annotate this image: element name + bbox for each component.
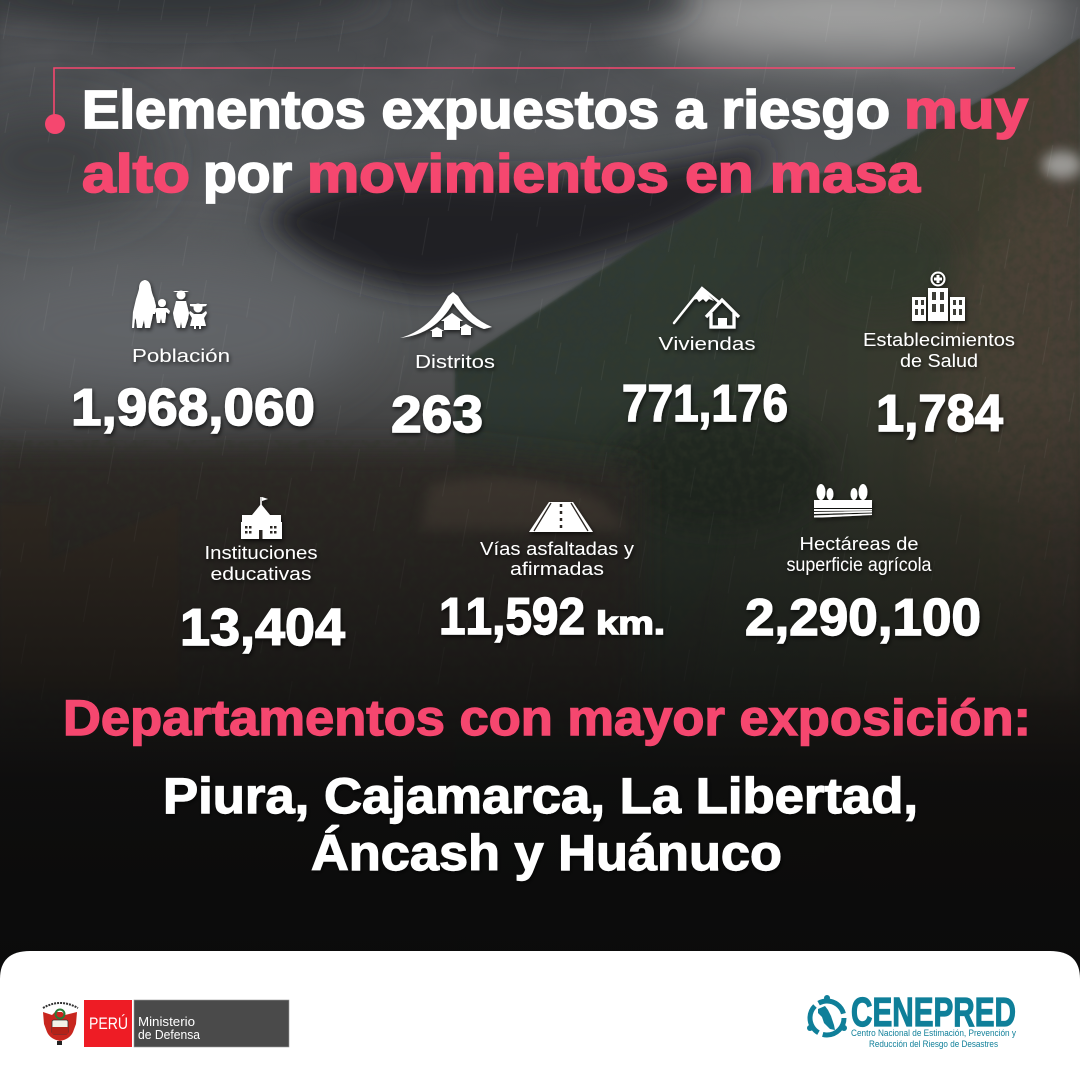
red PERÚ box <box>84 1000 132 1047</box>
label: Viviendas <box>658 334 756 354</box>
value: 771,176 <box>622 375 788 433</box>
label: Establecimientos <box>863 330 1015 350</box>
icon: family <box>132 280 207 329</box>
title text: alto <box>82 144 190 204</box>
title accent line and dot <box>45 68 1015 134</box>
stat: Vías asfaltadas y afirmadas: km. <box>596 605 665 641</box>
value: 263 <box>391 386 483 444</box>
icon: hospital <box>912 272 965 321</box>
icon: coat of arms <box>43 1003 78 1045</box>
value: 11,592 <box>439 588 585 646</box>
title text: movimientos en masa <box>307 144 921 204</box>
label: Distritos <box>415 352 495 372</box>
icon: mountain and house <box>674 288 739 328</box>
stat: Instituciones educativas <box>180 497 345 657</box>
label: Hectáreas de <box>800 534 918 554</box>
icon: road <box>529 502 593 532</box>
title text: muy <box>904 80 1028 140</box>
title text: por <box>203 144 292 204</box>
stat: Viviendas <box>622 288 788 433</box>
CENEPRED full name <box>851 1028 1016 1049</box>
value: 13,404 <box>180 599 345 657</box>
stat: Instituciones educativas: educativas <box>210 564 312 584</box>
red PERÚ box: PERÚ <box>89 1014 128 1033</box>
stat: Establecimientos de Salud <box>863 272 1015 443</box>
label: Vías asfaltadas y <box>480 539 634 559</box>
CENEPRED wordmark: CENEPRED <box>851 989 1016 1035</box>
subheading: departamentos: Departamentos con mayor exposición: <box>63 690 1031 746</box>
footer white band <box>0 951 1080 1080</box>
stat: Hectáreas de superficie agrícola: superficie agrícola <box>786 555 932 576</box>
stat: Hectáreas de superficie agrícola <box>745 484 981 647</box>
departments list: Piura, Cajamarca, La Libertad, <box>163 768 918 824</box>
stat: Población <box>71 280 315 437</box>
stat: Vías asfaltadas y afirmadas: afirmadas <box>510 559 604 579</box>
icon: circle with Peru map <box>807 995 847 1035</box>
departments list <box>163 768 918 881</box>
grey Ministerio de Defensa box: Ministerio <box>138 1014 195 1029</box>
icon: houses under mountain roof <box>400 292 492 338</box>
stat: Distritos <box>391 292 495 444</box>
icon: school <box>241 497 282 539</box>
title block <box>45 68 1028 204</box>
grey Ministerio de Defensa box <box>134 1000 289 1047</box>
title text: Elementos expuestos a riesgo <box>82 80 890 140</box>
title text <box>82 80 1028 204</box>
departments list: Áncash y Huánuco <box>311 825 782 881</box>
logo: Perú Ministerio de Defensa <box>43 1000 289 1047</box>
value: 1,968,060 <box>71 379 315 437</box>
stat: Vías asfaltadas y afirmadas <box>439 502 665 646</box>
value: 1,784 <box>876 385 1003 443</box>
stat: Establecimientos de Salud: de Salud <box>900 351 978 371</box>
label: Instituciones <box>204 543 318 563</box>
label: Población <box>132 346 230 366</box>
icon: trees and field <box>814 484 872 518</box>
logo: CENEPRED <box>807 989 1016 1049</box>
grey Ministerio de Defensa box: de Defensa <box>138 1027 201 1042</box>
value: 2,290,100 <box>745 589 981 647</box>
CENEPRED full name: Reducción del Riesgo de Desastres <box>869 1039 998 1049</box>
CENEPRED full name: Centro Nacional de Estimación, Prevención y <box>851 1028 1016 1038</box>
